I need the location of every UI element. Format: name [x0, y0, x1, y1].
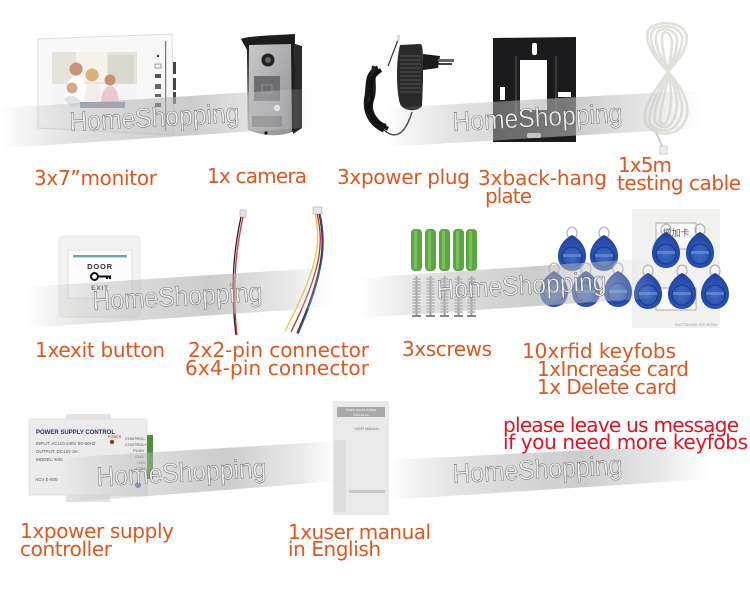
- item: door camera: [241, 34, 302, 135]
- door label: DOOR: [87, 262, 113, 271]
- watermark band: row 1 left: [0, 88, 317, 148]
- key icon: [98, 276, 111, 279]
- controller printed text: MODEL: K80: [36, 457, 63, 462]
- controller printed text: POWER SUPPLY CONTROL: [36, 430, 115, 436]
- label: connectors: 2x2-pin connector: [188, 338, 370, 362]
- watermark text: row 3 right: HomeShopping: [452, 450, 623, 489]
- item: user manual: [333, 401, 389, 515]
- watermark text: row 3 left: HomeShopping: [96, 453, 267, 492]
- controller printed text: INPUT: AC110-240V 50-60HZ: [36, 441, 96, 446]
- item: exit button: [59, 236, 140, 317]
- label: keyfobs and cards: 1x Delete card: [537, 375, 677, 399]
- item: increase and delete cards: [632, 209, 720, 328]
- message: more keyfobs: if you need more keyfobs: [503, 430, 748, 454]
- item: increase and delete cards: 0007764040 119 30754: [675, 322, 718, 327]
- controller printed text: [35, 430, 148, 482]
- watermark band: row 1 right: [385, 90, 703, 147]
- watermark band: row 2 right: [360, 258, 655, 318]
- controller printed text: CONTROL-: [125, 436, 147, 441]
- item: user manual: USER MANUAL: [354, 427, 380, 431]
- item: monitor: [38, 34, 176, 135]
- label: back-hang plate: 3xback-hang: [478, 166, 607, 190]
- label: power supply controller: controller: [20, 537, 113, 561]
- label: screws: 3xscrews: [402, 337, 492, 361]
- label: connectors: [185, 338, 370, 380]
- label: back-hang plate: plate: [485, 184, 532, 208]
- label: power plug: 3xpower plug: [337, 165, 470, 189]
- controller printed text: GND: [135, 454, 144, 459]
- watermark band: row 3 left: [60, 441, 340, 503]
- item: testing cable: [645, 23, 687, 154]
- label: user manual: [288, 520, 431, 561]
- message: more keyfobs: please leave us message: [503, 413, 739, 437]
- label: testing cable: 1x5m: [618, 153, 672, 177]
- label: keyfobs and cards: 10xrfid keyfobs: [522, 339, 676, 363]
- label: user manual: 1xuser manual: [288, 520, 431, 544]
- item: wall anchors and screws: [411, 229, 477, 317]
- item: power plug: [366, 35, 454, 135]
- controller printed text: ACV E-500: [35, 477, 58, 482]
- label: testing cable: testing cable: [617, 171, 741, 195]
- item: back-hang plate: [493, 37, 576, 142]
- label: keyfobs and cards: 1xIncrease card: [537, 357, 689, 381]
- label: exit button: 1xexit button: [35, 338, 165, 362]
- monitor screen photo: [52, 52, 137, 108]
- item: 2-pin connector: [233, 210, 246, 335]
- item: increase and delete cards: 增加卡: [662, 226, 690, 239]
- item: 4-pin connector: [285, 207, 323, 334]
- item: power supply controller: [29, 414, 153, 502]
- label: testing cable: [617, 153, 741, 195]
- controller printed text: PUSH: [133, 448, 144, 453]
- watermark text: row 1 right: HomeShopping: [452, 98, 623, 137]
- exit label: EXIT: [91, 285, 109, 292]
- controller printed text: POWER: [108, 435, 122, 439]
- watermark text: row 2 right: HomeShopping: [436, 266, 607, 305]
- item: rfid keyfobs: [540, 224, 729, 309]
- controller printed text: OUTPUT: DC12V 3A: [36, 449, 78, 454]
- label: keyfobs and cards: [522, 339, 689, 399]
- message: more keyfobs: [503, 413, 748, 454]
- controller printed text: +12V: [136, 460, 146, 465]
- watermark text: row 2 left: HomeShopping: [92, 277, 263, 316]
- label: user manual: in English: [288, 537, 381, 561]
- watermark text: row 1 left: HomeShopping: [69, 98, 240, 137]
- controller printed text: CONTROL+: [125, 442, 148, 447]
- label: camera: 1x camera: [207, 164, 307, 188]
- label: monitor: 3x7”monitor: [34, 166, 158, 190]
- label: back-hang plate: [478, 166, 607, 208]
- label: connectors: 6x4-pin connector: [185, 356, 370, 380]
- label: power supply controller: [20, 519, 174, 561]
- watermark band: row 2 left: [25, 267, 335, 328]
- watermark band: row 3 right: [388, 444, 710, 500]
- item: user manual: FOR VILLA: [353, 413, 369, 417]
- label: power supply controller: 1xpower supply: [20, 519, 174, 543]
- item: user manual: VIDEO DOOR PHONE: [346, 408, 376, 412]
- controller printed text: COM: [136, 466, 145, 471]
